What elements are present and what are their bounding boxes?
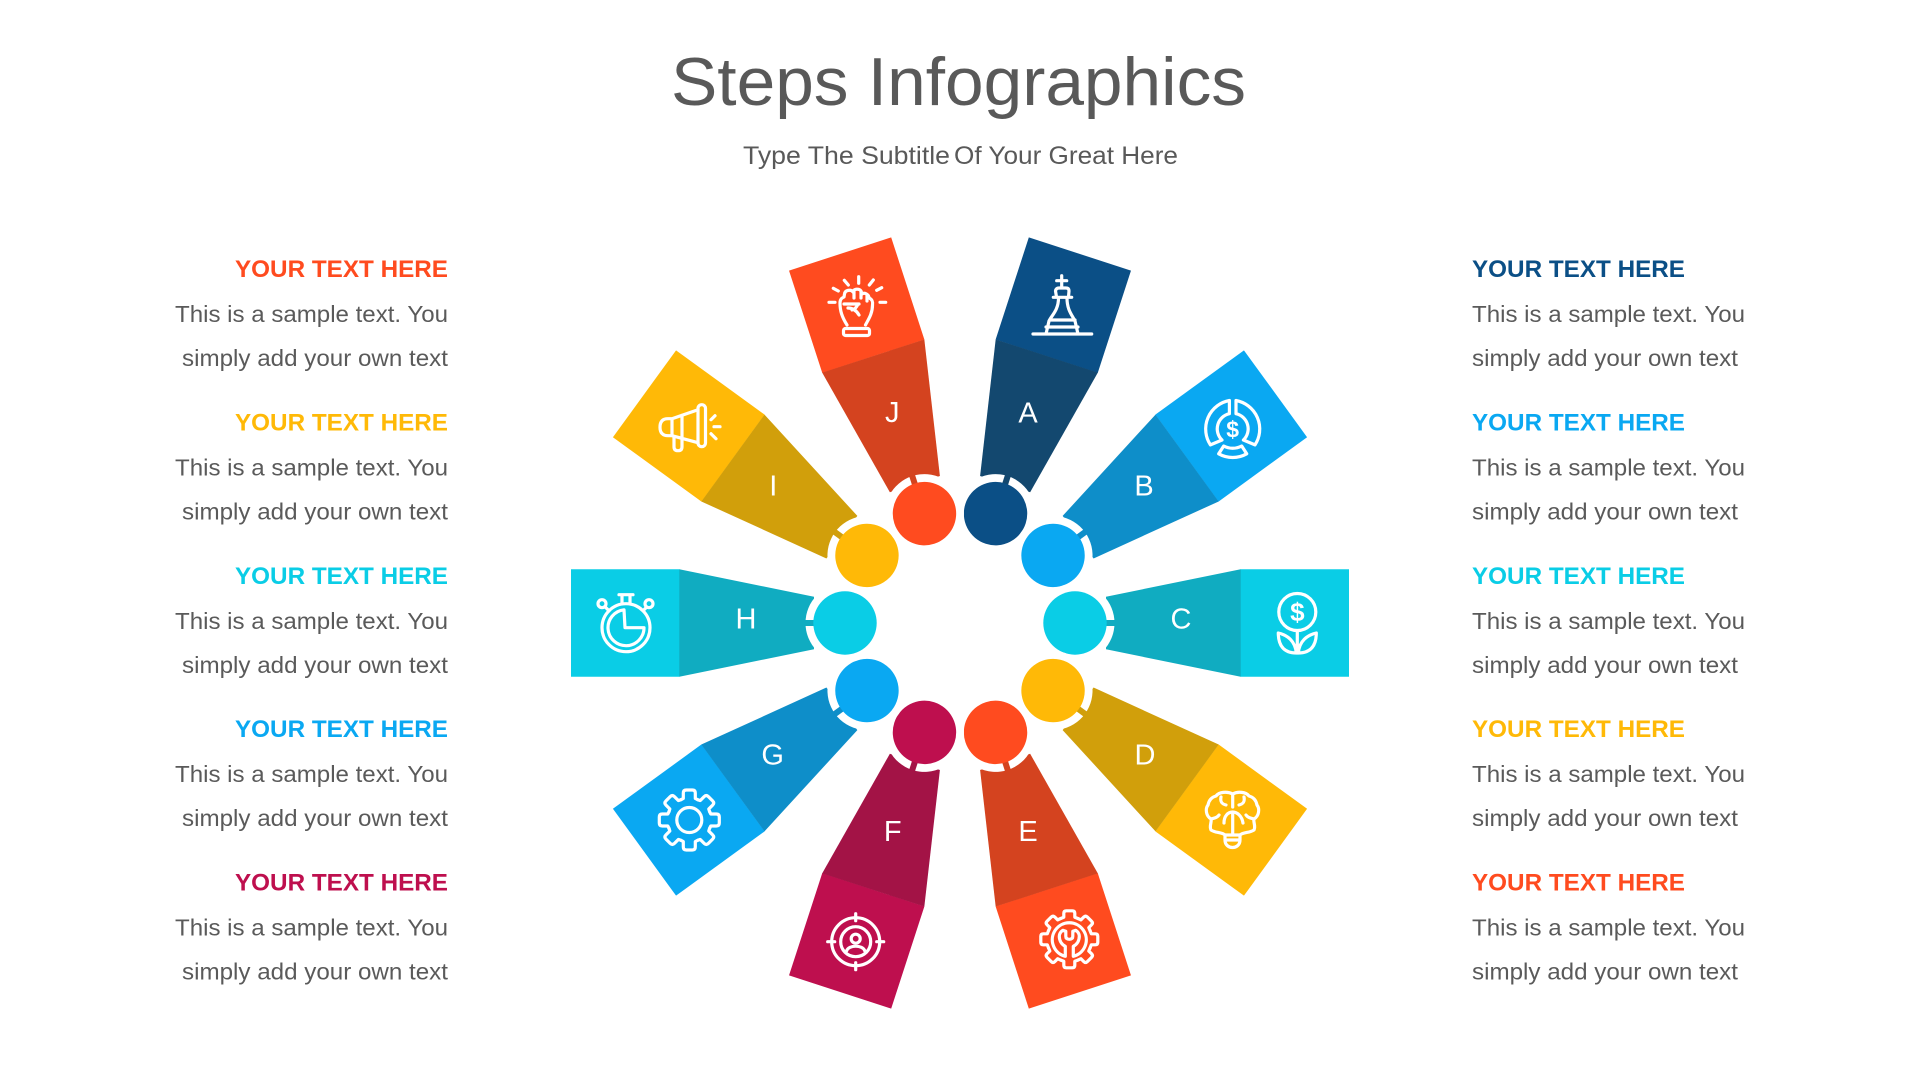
right text block 1: simply add your own text bbox=[1472, 345, 1739, 371]
step E bbox=[932, 678, 1131, 1009]
left text block 5: YOUR TEXT HERE bbox=[235, 870, 448, 897]
step D bbox=[990, 624, 1307, 896]
right text block 4: This is a sample text. You bbox=[1472, 761, 1745, 787]
step J bbox=[789, 237, 988, 568]
right text block 2: This is a sample text. You bbox=[1472, 454, 1745, 480]
letter G: G bbox=[761, 740, 784, 772]
icon: coin segments: $ bbox=[1226, 416, 1239, 442]
letter I: I bbox=[769, 470, 777, 502]
right text block 4 bbox=[1472, 716, 1745, 831]
left text block 1: YOUR TEXT HERE bbox=[235, 256, 448, 283]
left text block 2 bbox=[175, 409, 449, 524]
right text block 3 bbox=[1472, 563, 1745, 678]
left text block 5 bbox=[175, 870, 449, 985]
tab A bbox=[932, 237, 1131, 568]
left text column bbox=[175, 256, 449, 985]
letter J: J bbox=[885, 397, 900, 429]
right text block 3: This is a sample text. You bbox=[1472, 608, 1745, 634]
left text block 3: YOUR TEXT HERE bbox=[235, 563, 448, 590]
left text block 5: This is a sample text. You bbox=[175, 915, 448, 941]
right text block 2 bbox=[1472, 409, 1745, 524]
icon: brain bulb bbox=[1206, 792, 1259, 848]
subtitle bbox=[743, 142, 1178, 170]
right text block 2: simply add your own text bbox=[1472, 498, 1739, 524]
icon: money flower: $ bbox=[1290, 597, 1305, 627]
icon: target person bbox=[828, 914, 884, 970]
tab D bbox=[990, 624, 1307, 896]
subtitle: Of Your Great Here bbox=[954, 142, 1178, 170]
step H bbox=[571, 569, 884, 677]
step I bbox=[613, 350, 930, 622]
letter H: H bbox=[736, 604, 756, 636]
right text block 1: This is a sample text. You bbox=[1472, 301, 1745, 327]
left text block 3: simply add your own text bbox=[182, 652, 449, 678]
right text block 3: simply add your own text bbox=[1472, 652, 1739, 678]
icon: money flower bbox=[1278, 594, 1316, 653]
step wheel bbox=[571, 237, 1349, 1009]
left text block 3 bbox=[175, 563, 449, 678]
left text block 4: YOUR TEXT HERE bbox=[235, 716, 448, 743]
icon: chess king bbox=[1033, 276, 1092, 334]
tab B bbox=[990, 350, 1307, 622]
left text block 4: This is a sample text. You bbox=[175, 761, 448, 787]
step C bbox=[1036, 569, 1349, 677]
right text block 1: YOUR TEXT HERE bbox=[1472, 256, 1685, 283]
icon: stopwatch bbox=[598, 595, 653, 652]
tab F bbox=[789, 678, 988, 1009]
step G bbox=[613, 624, 930, 896]
left text block 2: YOUR TEXT HERE bbox=[235, 409, 448, 436]
icon: megaphone bbox=[660, 405, 720, 451]
icon: cog bbox=[659, 790, 719, 850]
tab G bbox=[613, 624, 930, 896]
letter F: F bbox=[884, 816, 902, 848]
tab E bbox=[932, 678, 1131, 1009]
left text block 3: This is a sample text. You bbox=[175, 608, 448, 634]
left text block 1: This is a sample text. You bbox=[175, 301, 448, 327]
tab H bbox=[571, 569, 884, 677]
step F bbox=[789, 678, 988, 1009]
right text block 5: simply add your own text bbox=[1472, 959, 1739, 985]
letter B: B bbox=[1134, 470, 1154, 502]
subtitle: Type The Subtitle bbox=[743, 142, 950, 170]
letter D: D bbox=[1135, 740, 1155, 772]
left text block 5: simply add your own text bbox=[182, 959, 449, 985]
letter A: A bbox=[1018, 398, 1038, 430]
tab C bbox=[1036, 569, 1349, 677]
left text block 2: This is a sample text. You bbox=[175, 454, 448, 480]
icon: gear with wrench bbox=[1041, 911, 1098, 968]
right text column bbox=[1472, 256, 1745, 985]
step A bbox=[932, 237, 1131, 568]
tab I bbox=[613, 350, 930, 622]
left text block 2: simply add your own text bbox=[182, 498, 449, 524]
left text block 4 bbox=[175, 716, 449, 831]
left text block 1 bbox=[175, 256, 449, 371]
letter E: E bbox=[1018, 816, 1038, 848]
left text block 1: simply add your own text bbox=[182, 345, 449, 371]
right text block 5: YOUR TEXT HERE bbox=[1472, 870, 1685, 897]
right text block 3: YOUR TEXT HERE bbox=[1472, 563, 1685, 590]
icon: coin segments bbox=[1206, 400, 1260, 457]
right text block 1 bbox=[1472, 256, 1745, 371]
tab J bbox=[789, 237, 988, 568]
icon: raised fist bbox=[829, 277, 886, 336]
title: Steps Infographics bbox=[671, 44, 1246, 120]
letter C: C bbox=[1171, 604, 1191, 636]
step B bbox=[990, 350, 1307, 622]
right text block 2: YOUR TEXT HERE bbox=[1472, 409, 1685, 436]
left text block 4: simply add your own text bbox=[182, 805, 449, 831]
right text block 5: This is a sample text. You bbox=[1472, 915, 1745, 941]
right text block 4: YOUR TEXT HERE bbox=[1472, 716, 1685, 743]
right text block 5 bbox=[1472, 870, 1745, 985]
right text block 4: simply add your own text bbox=[1472, 805, 1739, 831]
